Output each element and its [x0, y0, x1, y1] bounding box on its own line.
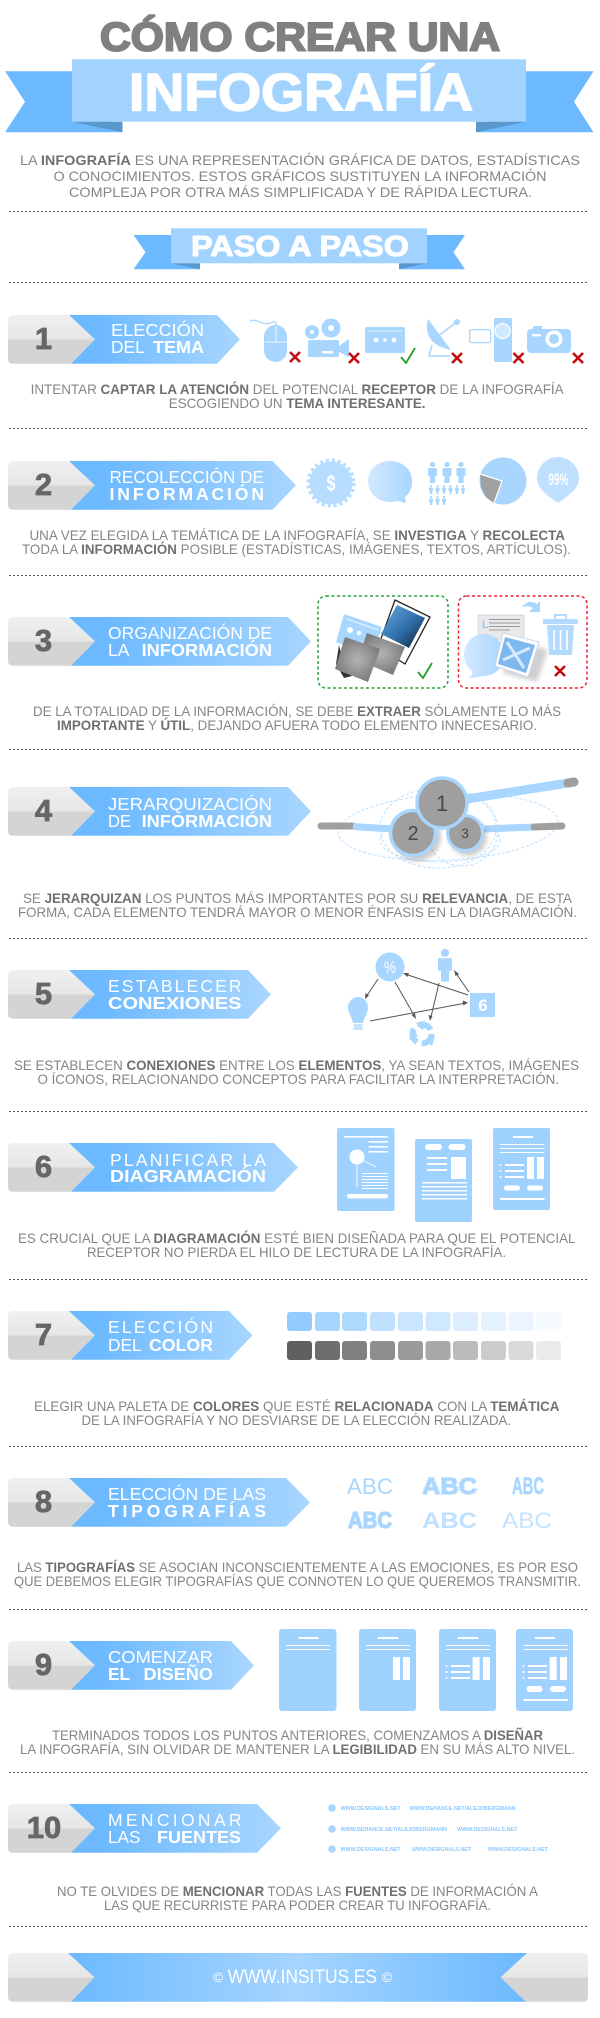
draft 4	[516, 1629, 573, 1711]
footer banner: ©	[382, 1969, 393, 1985]
icon: speech bubble	[368, 461, 412, 503]
ribbon: PASO A PASO: PASO A PASO	[191, 231, 409, 263]
step 3 banner: 3	[35, 623, 52, 658]
intro text	[20, 152, 580, 200]
step 6 banner: PLANIFICAR LA	[110, 1150, 266, 1170]
footer banner	[8, 1953, 588, 2002]
step 1 icons: media devices	[250, 318, 583, 363]
gray images	[335, 633, 405, 682]
step 5 banner	[8, 970, 271, 1019]
node: percent: %	[384, 958, 396, 977]
step 1 banner: 1	[35, 321, 52, 356]
circle 3: 3	[461, 825, 469, 841]
step 5 banner: ESTABLECER	[108, 976, 242, 996]
bubble	[464, 634, 504, 678]
step 3 text	[33, 703, 561, 733]
icon: video camera	[470, 318, 512, 362]
step 1 banner: ELECCIÓN	[111, 319, 204, 340]
step 7 banner: DEL	[108, 1335, 142, 1355]
icon: 99% badge: 99%	[548, 470, 568, 489]
node: six	[470, 993, 495, 1017]
step 4 banner: 4	[35, 793, 53, 828]
step 10 banner: FUENTES	[157, 1827, 241, 1847]
colour palette	[287, 1312, 561, 1360]
step 1 banner	[8, 315, 240, 364]
layout 2	[415, 1139, 472, 1222]
draft 3	[439, 1629, 496, 1711]
step 4 text: SE JERARQUIZAN LOS PUNTOS MÁS IMPORTANTES POR SU RELEVANCIA, DE ESTA	[23, 890, 573, 906]
step 2 banner	[8, 461, 296, 510]
source list	[328, 1804, 549, 1853]
step 1 text	[31, 380, 564, 411]
step 1 text: ESCOGIENDO UN TEMA INTERESANTE.	[169, 395, 426, 411]
step 7 text	[34, 1398, 560, 1428]
layout 3	[493, 1128, 550, 1210]
typeface samples: ABC	[422, 1508, 477, 1533]
source links: WWW.DESIGNALS.NET	[341, 1847, 401, 1853]
step 8 text	[14, 1559, 581, 1589]
icon: satellite dish	[427, 319, 460, 356]
step 4 text: FORMA, CADA ELEMENTO TENDRÁ MAYOR O MENOR ÉNFASIS EN LA DIAGRAMACIÓN.	[18, 904, 577, 920]
step 8 text: LAS TIPOGRAFÍAS SE ASOCIAN INCONSCIENTEMENTE A LAS EMOCIONES, ES POR ESO	[17, 1559, 578, 1575]
step 7 banner: ELECCIÓN	[108, 1316, 213, 1337]
step 10 banner: MENCIONAR	[108, 1810, 242, 1830]
node: recycle	[409, 1021, 435, 1046]
step 10 banner	[8, 1804, 281, 1853]
step 6 banner: DIAGRAMACIÓN	[110, 1165, 266, 1186]
step 6 text	[18, 1229, 576, 1260]
panel: discarded elements	[458, 596, 587, 688]
typeface samples	[347, 1473, 552, 1533]
step 10 text	[57, 1883, 539, 1913]
node: person	[438, 949, 452, 982]
step 4 banner	[8, 787, 311, 836]
circle 2: 2	[407, 823, 419, 845]
circle 3	[448, 816, 487, 856]
step 10 banner: 10	[27, 1810, 61, 1845]
step 9 text	[20, 1726, 575, 1757]
draft 2	[359, 1629, 416, 1711]
step 4 banner: JERARQUIZACIÓN	[108, 793, 272, 814]
source links: WWW.DESIGNALS.NET	[488, 1847, 549, 1853]
source links: WWW.BEHANCE.NET/ALEJOBERGMANN	[410, 1806, 516, 1812]
step 8 banner: 8	[35, 1484, 52, 1519]
design progress thumbnails	[279, 1629, 573, 1711]
arrow	[522, 601, 540, 612]
typeface samples: ABC	[512, 1473, 544, 1500]
step 10 text: NO TE OLVIDES DE MENCIONAR TODAS LAS FUENTES DE INFORMACIÓN A	[57, 1883, 539, 1899]
layout 1	[337, 1128, 394, 1211]
step 7 banner: COLOR	[149, 1335, 213, 1355]
step 2 banner: INFORMACIÓN	[110, 483, 264, 504]
icon: cross	[555, 666, 565, 676]
step 2 banner: 2	[35, 467, 52, 502]
main ribbon: INFOGRAFÍA: INFOGRAFÍA	[129, 63, 473, 123]
arrows	[365, 970, 469, 1021]
step 9 banner: EL	[108, 1664, 130, 1684]
step 9 text: TERMINADOS TODOS LOS PUNTOS ANTERIORES, COMENZAMOS A DISEÑAR	[52, 1726, 543, 1743]
intro text: O CONOCIMIENTOS. ESTOS GRÁFICOS SUSTITUYEN LA INFORMACIÓN	[54, 168, 546, 184]
circle 1: 1	[436, 791, 448, 816]
step 5 text: SE ESTABLECEN CONEXIONES ENTRE LOS ELEMENTOS, YA SEAN TEXTOS, IMÁGENES	[14, 1057, 579, 1073]
layout thumbnails	[337, 1128, 550, 1222]
step 4 banner: DE	[108, 811, 131, 831]
gray swatches	[287, 1341, 561, 1360]
step 10 banner: LAS	[108, 1827, 140, 1847]
step 6 text: RECEPTOR NO PIERDA EL HILO DE LECTURA DE LA INFOGRAFÍA.	[87, 1244, 506, 1260]
step 4 banner: INFORMACIÓN	[142, 810, 272, 831]
source links: WWW.DESIGNALS.NET	[341, 1806, 401, 1812]
step 8 banner: ELECCIÓN DE LAS	[108, 1483, 266, 1504]
step 1 banner: TEMA	[153, 337, 204, 357]
connections diagram	[348, 949, 495, 1046]
step 1 banner: DEL	[111, 337, 145, 357]
step 3 banner: INFORMACIÓN	[142, 639, 272, 660]
photo	[378, 600, 430, 664]
document: L	[482, 619, 489, 631]
panel: kept elements	[318, 596, 448, 688]
step 8 banner	[8, 1478, 310, 1527]
step 2 banner: RECOLECCIÓN DE	[110, 466, 264, 487]
step 7 banner: 7	[35, 1317, 52, 1352]
step 7 banner	[8, 1311, 252, 1360]
typeface samples: ABC	[502, 1508, 552, 1533]
step 10 text: LAS QUE RECURRISTE PARA PODER CREAR TU INFOGRAFÍA.	[104, 1897, 491, 1913]
node: bulb	[348, 997, 368, 1030]
step 2 text	[22, 527, 571, 557]
blue swatches	[287, 1312, 561, 1331]
step 3 text: IMPORTANTE Y ÚTIL, DEJANDO AFUERA TODO ELEMENTO INNECESARIO.	[57, 716, 537, 733]
step 2 icons: data	[309, 457, 579, 505]
step 6 text: ES CRUCIAL QUE LA DIAGRAMACIÓN ESTÉ BIEN DISEÑADA PARA QUE EL POTENCIAL	[18, 1229, 576, 1246]
icon: photo camera	[527, 326, 571, 353]
step 9 text: LA INFOGRAFÍA, SIN OLVIDAR DE MANTENER LA LEGIBILIDAD EN SU MÁS ALTO NIVEL.	[20, 1741, 575, 1757]
step 5 text: O ÍCONOS, RELACIONANDO CONCEPTOS PARA FACILITAR LA INTERPRETACIÓN.	[38, 1071, 559, 1087]
pointer bars	[321, 782, 574, 829]
node: percent	[376, 952, 404, 982]
icon: approved check	[401, 348, 415, 363]
step 6 banner	[8, 1143, 298, 1192]
intro text: LA INFOGRAFÍA ES UNA REPRESENTACIÓN GRÁFICA DE DATOS, ESTADÍSTICAS	[20, 152, 580, 168]
step 9 banner: COMENZAR	[108, 1647, 213, 1667]
step 4 text	[18, 890, 577, 920]
step 8 banner: TIPOGRAFÍAS	[108, 1500, 266, 1521]
icon: people	[428, 462, 466, 505]
step 6 banner: 6	[35, 1149, 52, 1184]
step 2 text: TODA LA INFORMACIÓN POSIBLE (ESTADÍSTICAS, IMÁGENES, TEXTOS, ARTÍCULOS).	[22, 540, 571, 557]
step 2 text: UNA VEZ ELEGIDA LA TEMÁTICA DE LA INFOGRAFÍA, SE INVESTIGA Y RECOLECTA	[30, 527, 565, 543]
footer banner: WWW.INSITUS.ES	[228, 1967, 377, 1988]
icon: check	[418, 663, 432, 678]
icon: mouse	[250, 320, 287, 362]
step 3 banner: LA	[108, 640, 130, 660]
source links: WWW.BEHANCE.NET/ALEJOBERGMANN	[341, 1827, 447, 1833]
icon: 99% badge	[537, 457, 579, 503]
icon: dollar burst	[309, 461, 353, 505]
footer banner: ©	[213, 1969, 224, 1985]
step 1 text: INTENTAR CAPTAR LA ATENCIÓN DEL POTENCIAL RECEPTOR DE LA INFOGRAFÍA	[31, 380, 564, 397]
step 9 banner	[8, 1641, 254, 1690]
step 3 banner: ORGANIZACIÓN DE	[108, 622, 272, 643]
step 3 banner	[8, 617, 311, 666]
step 5 banner: CONEXIONES	[108, 993, 242, 1013]
title: CÓMO CREAR UNA: CÓMO CREAR UNA	[100, 14, 500, 60]
icon: cassette tilted	[336, 614, 382, 657]
icon: rejected marks	[290, 352, 583, 363]
step 7 text: ELEGIR UNA PALETA DE COLORES QUE ESTÉ RELACIONADA CON LA TEMÁTICA	[34, 1398, 560, 1414]
draft 1	[279, 1629, 336, 1711]
node: six: 6	[478, 996, 488, 1015]
icon: film camera	[305, 318, 349, 357]
step 9 banner: 9	[35, 1647, 52, 1682]
source links: WWW.DESIGNALS.NET	[412, 1847, 472, 1853]
icon: dollar burst: $	[326, 471, 336, 496]
circle 2	[390, 810, 441, 861]
typeface samples: ABC	[347, 1474, 393, 1499]
pie chart	[480, 458, 526, 504]
icon: cassette	[365, 327, 405, 353]
source links	[341, 1806, 549, 1853]
source links: WWW.DESIGNALS.NET	[457, 1827, 518, 1833]
hierarchy diagram	[321, 778, 574, 868]
step 3 text: DE LA TOTALIDAD DE LA INFORMACIÓN, SE DEBE EXTRAER SÓLAMENTE LO MÁS	[33, 703, 561, 719]
step 5 banner: 5	[35, 976, 52, 1011]
typeface samples: ABC	[422, 1473, 477, 1499]
icon: trash	[543, 615, 578, 655]
step 7 text: DE LA INFOGRAFÍA Y NO DESVIARSE DE LA ELECCIÓN REALIZADA.	[82, 1412, 511, 1428]
typeface samples: ABC	[348, 1507, 392, 1533]
step 9 banner: DISEÑO	[144, 1663, 213, 1684]
main ribbon: INFOGRAFÍA	[5, 59, 594, 132]
image tilted	[495, 633, 548, 682]
circle 1	[417, 778, 467, 828]
intro text: COMPLEJA POR OTRA MÁS SIMPLIFICADA Y DE RÁPIDA LECTURA.	[69, 184, 532, 200]
step 5 text	[14, 1057, 579, 1087]
ribbon: PASO A PASO	[134, 228, 465, 269]
